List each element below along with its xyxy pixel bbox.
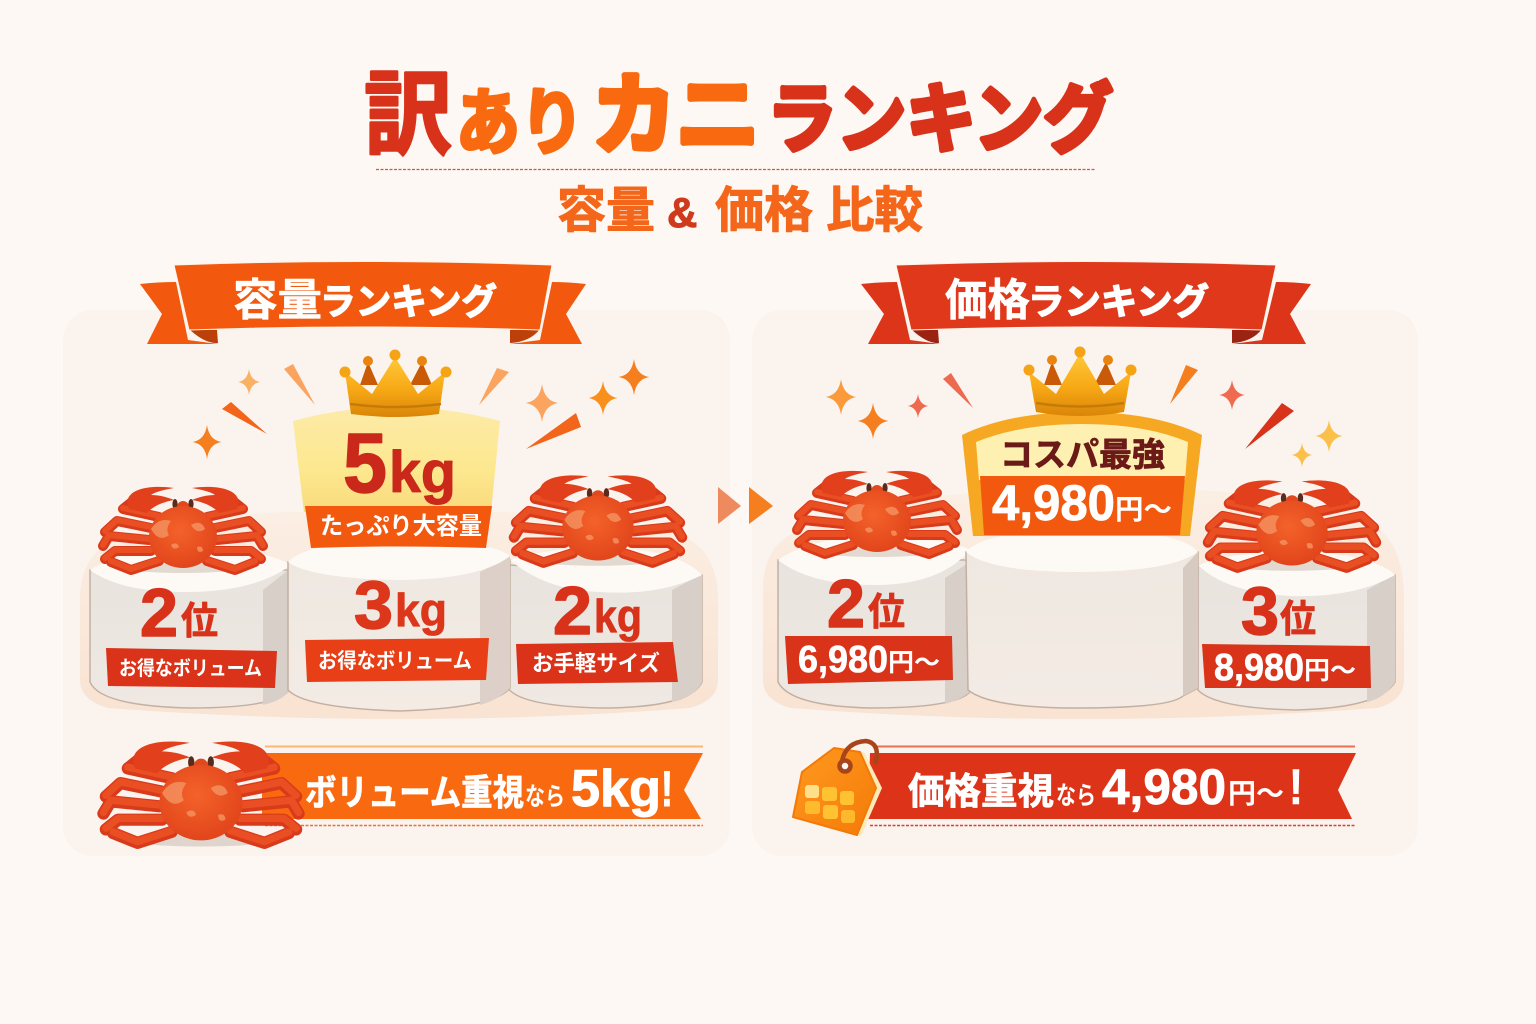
title: ランキング [767, 78, 1113, 163]
left podium [90, 548, 291, 708]
subtitle: 比較 [826, 184, 923, 238]
3kg label: kg [395, 584, 447, 636]
label: お手軽サイズ [516, 642, 678, 684]
crab: right [1208, 480, 1376, 571]
subtitle: 容量 [557, 184, 655, 238]
panel: capacity ranking [63, 310, 730, 856]
2nd place label: 2 [140, 575, 178, 651]
panel: price ranking [752, 310, 1418, 856]
bottom ribbon: volume: なら [525, 783, 565, 811]
plaque: best value: コスパ最強 [1000, 436, 1165, 473]
gold box: 5kg [293, 407, 500, 548]
gold box: 5kg: たっぷり大容量 [320, 513, 482, 540]
price 6,980: 円〜 [888, 649, 940, 677]
crab: right [514, 475, 682, 566]
2nd place label: 位 [868, 592, 905, 634]
2nd place label: 2 [827, 566, 865, 642]
label: お得なボリューム (center) [305, 638, 489, 682]
price 6,980 [785, 636, 953, 684]
base plate [763, 490, 1404, 719]
gold box: 5kg: 5 [343, 416, 387, 510]
2nd place label: 位 [181, 601, 218, 643]
bottom ribbon: price: 価格重視 [908, 771, 1054, 812]
bottom ribbon: volume: 5kg [571, 760, 661, 818]
subtitle: & [667, 189, 697, 236]
podium: capacity [80, 350, 718, 719]
2kg label: 2 [553, 573, 592, 649]
price 6,980: 6,980 [798, 639, 888, 681]
plaque: best value [962, 412, 1202, 536]
price 8,980 [1202, 644, 1371, 689]
bottom ribbon: volume: ! [661, 761, 673, 817]
plaque: best value: 4,980 [992, 475, 1115, 531]
right podium [508, 548, 702, 708]
bottom ribbon: price [868, 746, 1356, 826]
bottom ribbon: price: なら [1056, 782, 1096, 810]
ribbon: price heading: 価格 [945, 276, 1030, 325]
bottom ribbon: volume [262, 746, 703, 826]
ribbon: capacity heading: 容量 [233, 276, 322, 325]
center podium [966, 530, 1198, 708]
crab: left [797, 471, 957, 557]
ribbon: price heading [861, 262, 1311, 344]
2nd place label [140, 575, 218, 651]
2kg label [553, 573, 642, 649]
3rd place label: 3 [1241, 573, 1279, 649]
ribbon: capacity heading [140, 262, 586, 344]
2kg label: kg [594, 590, 642, 642]
price 8,980: 円〜 [1304, 657, 1356, 685]
label: お手軽サイズ: お手軽サイズ [532, 651, 660, 676]
price 8,980: 8,980 [1214, 647, 1304, 689]
ribbon: price heading: ランキング [1028, 281, 1209, 322]
3rd place label [1241, 573, 1316, 649]
subtitle [557, 184, 923, 238]
3rd place label: 位 [1280, 599, 1316, 641]
crab: left [103, 487, 263, 573]
title: あり [456, 84, 584, 164]
bottom ribbon: volume: ボリューム重視 [305, 772, 524, 813]
podium: price [763, 346, 1404, 719]
bottom ribbon: price: ! [1289, 759, 1303, 815]
3kg label: 3 [354, 567, 393, 643]
title: 訳 [364, 65, 452, 167]
label: お得なボリューム (center): お得なボリューム [318, 650, 472, 673]
ribbon: capacity heading: ランキング [320, 281, 497, 322]
label: お得なボリューム (left): お得なボリューム [119, 657, 262, 680]
label: お得なボリューム (left) [106, 648, 277, 688]
bottom ribbon: price: 円〜 [1228, 778, 1284, 809]
center podium [288, 540, 510, 711]
arrows between panels [718, 487, 773, 524]
right podium [1198, 551, 1395, 710]
crown [340, 350, 452, 417]
2nd place label [827, 566, 905, 642]
base plate [80, 512, 718, 719]
title [364, 65, 1113, 167]
3kg label [354, 567, 447, 643]
crab: bottom left [103, 741, 299, 847]
left sparkles and rays [193, 359, 649, 459]
bottom ribbon: price: 4,980 [1102, 759, 1226, 815]
icon: price tag [793, 741, 882, 836]
crown [1024, 346, 1136, 416]
gold box: 5kg: kg [389, 440, 456, 505]
title: カニ [592, 66, 760, 165]
subtitle: 価格 [715, 184, 813, 238]
right sparkles and rays [826, 365, 1343, 467]
left podium [778, 538, 970, 708]
plaque: best value: 円〜 [1115, 494, 1172, 525]
